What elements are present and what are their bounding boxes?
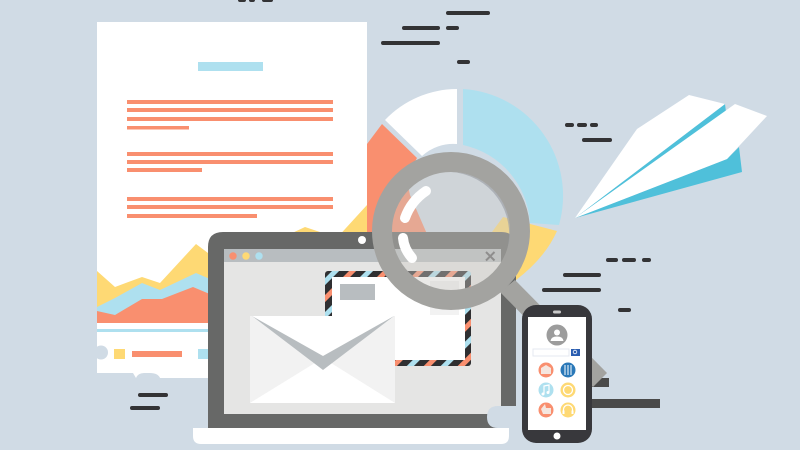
- close icon: [486, 252, 494, 260]
- app icon: headphones: [560, 402, 576, 418]
- laptop base: [193, 428, 509, 444]
- lens ring: [382, 162, 520, 300]
- envelope: [250, 316, 395, 403]
- window dots: [229, 252, 263, 260]
- app icon: music: [538, 382, 554, 398]
- app icon: equalizer: [560, 362, 576, 378]
- magnifying glass: [382, 162, 607, 387]
- document page: [94, 22, 367, 378]
- phone home button: [554, 432, 560, 440]
- plane fold: [575, 104, 726, 218]
- plane left wing: [575, 95, 725, 218]
- lens inner shadow: [451, 172, 510, 250]
- plane underside: [575, 147, 742, 218]
- laptop: [193, 232, 521, 446]
- laptop body: [208, 232, 516, 428]
- plane right wing: [575, 104, 767, 218]
- phone speaker: [553, 310, 561, 314]
- app icon: thumbs up: [538, 402, 554, 418]
- pie slice: yellow: [490, 217, 557, 290]
- camera: [358, 236, 366, 244]
- browser title bar: [224, 249, 501, 262]
- app icon: disc: [560, 382, 576, 398]
- legend: [94, 346, 210, 360]
- lens glass: [389, 169, 513, 293]
- decorative dashes: top: [130, 0, 651, 410]
- pie slice: blue: [463, 89, 563, 225]
- pie chart: [355, 89, 563, 290]
- lens highlights: [403, 191, 426, 258]
- phone screen: [528, 317, 586, 430]
- dark bars behind phone: [590, 378, 660, 408]
- paper plane: [575, 95, 767, 218]
- profile avatar: [546, 324, 568, 346]
- search bar: [533, 349, 580, 356]
- notch: [487, 406, 520, 428]
- airmail letter: [325, 271, 471, 366]
- pie slice: orange: [355, 124, 427, 234]
- pie slice: white: [385, 89, 457, 156]
- handle: [500, 280, 607, 387]
- area chart: [97, 205, 367, 332]
- app icon: mail: [538, 362, 554, 378]
- document text lines: [127, 100, 333, 218]
- app icons: [538, 362, 576, 418]
- smartphone: [522, 305, 592, 443]
- document title bar: [198, 62, 263, 71]
- phone body: [522, 305, 592, 443]
- laptop screen: [224, 249, 501, 414]
